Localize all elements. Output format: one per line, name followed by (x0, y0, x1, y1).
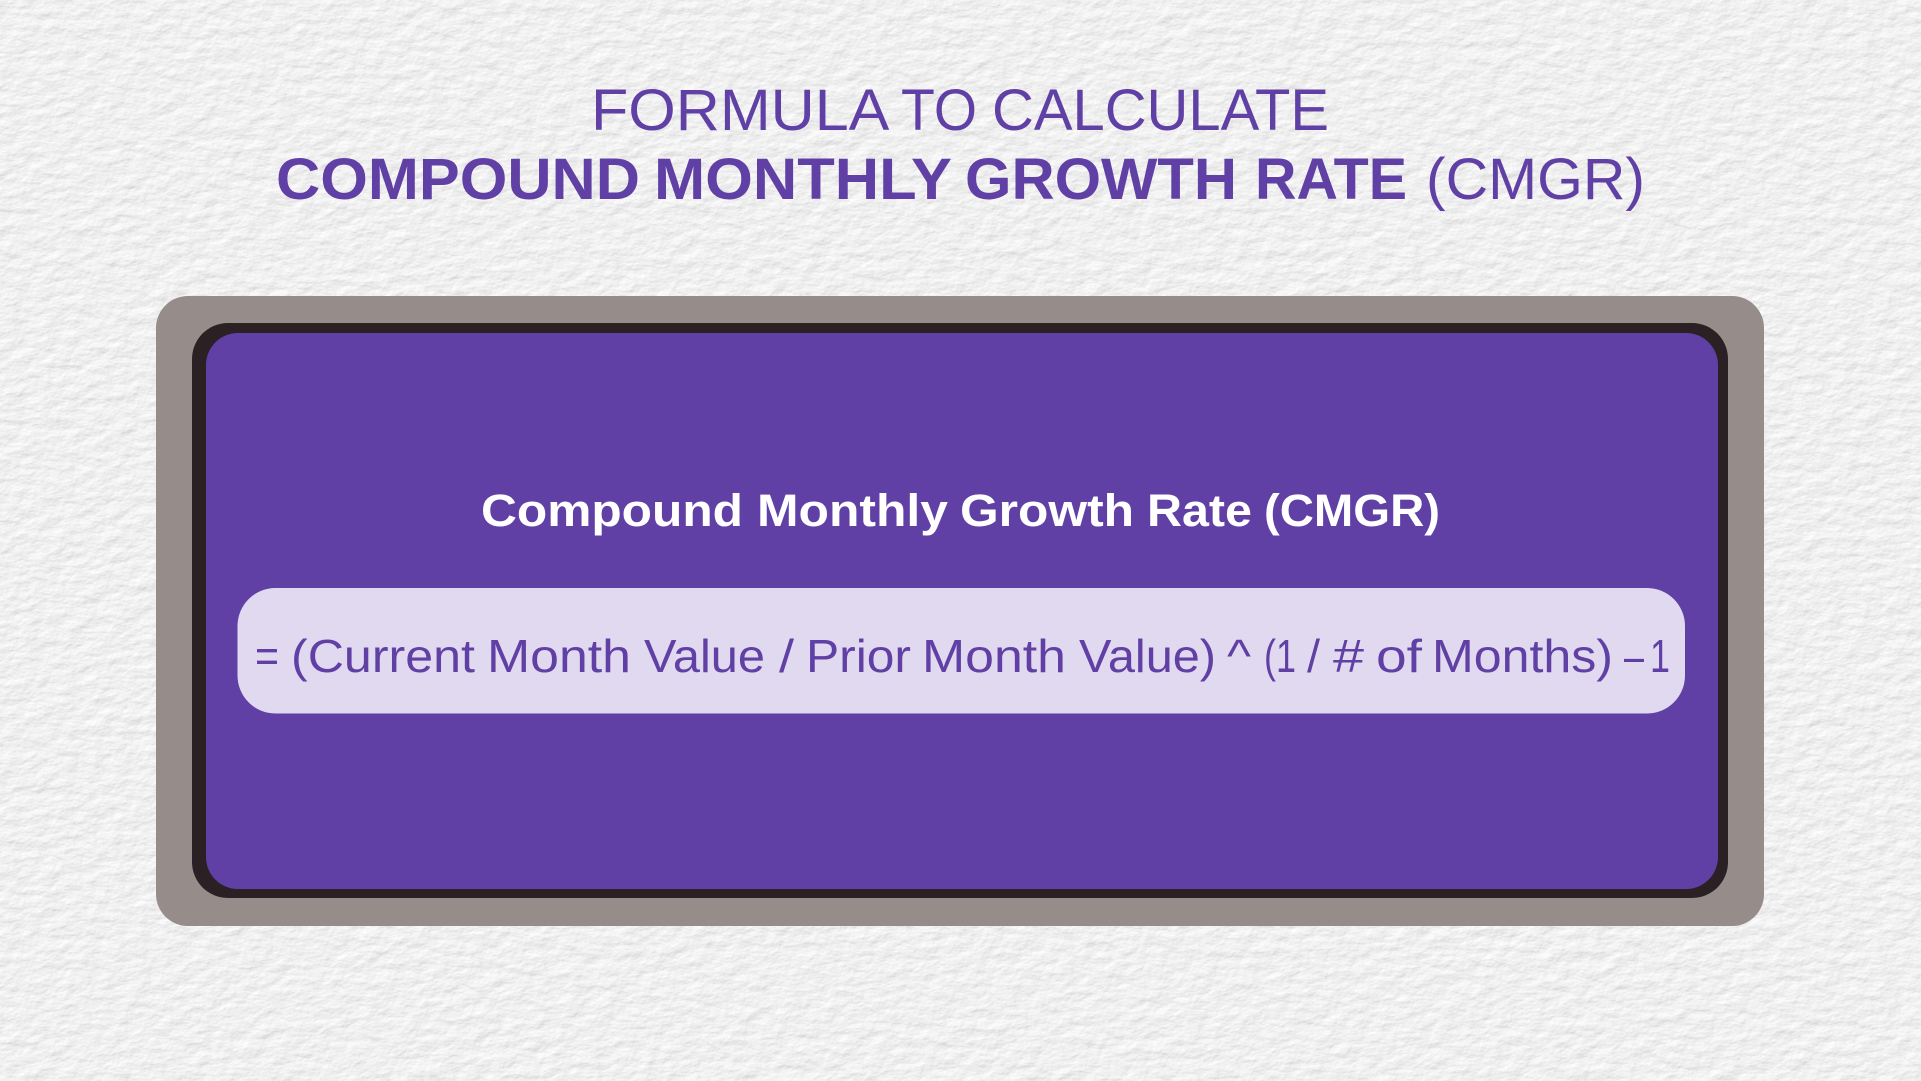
heading: CMGR: Compound (481, 485, 743, 536)
formula text: # (1333, 630, 1364, 682)
formula text: Value) (1079, 630, 1216, 682)
title line 2: MONTHLY (654, 147, 952, 212)
heading: CMGR: Rate (1147, 485, 1252, 536)
title line 2: (CMGR) (1426, 147, 1645, 212)
formula text: of (1376, 630, 1422, 682)
formula text: = (255, 630, 279, 682)
formula text: (Current (291, 630, 475, 682)
formula text: / (1307, 630, 1320, 682)
formula text: Months) (1432, 630, 1613, 682)
formula text: ^ (1227, 630, 1251, 682)
panel: purple fill (206, 333, 1718, 889)
heading: CMGR: (CMGR) (1264, 485, 1440, 536)
formula text: Value (644, 630, 765, 682)
formula text: / (779, 630, 794, 682)
formula text: Month (922, 630, 1066, 682)
formula pill (238, 588, 1685, 714)
panel: outer frame (156, 296, 1764, 926)
heading: CMGR: Growth (960, 485, 1134, 536)
panel: formula card (156, 296, 1764, 926)
title line 2: GROWTH (965, 147, 1237, 212)
title line 2: COMPOUND (276, 147, 640, 212)
title line 1: TO (901, 78, 977, 143)
formula text: – (1624, 630, 1644, 682)
formula text: Month (487, 630, 631, 682)
formula text: (1 (1264, 630, 1296, 682)
title (276, 78, 1645, 212)
title line 1: FORMULA (591, 78, 890, 143)
title line 1: CALCULATE (992, 78, 1329, 143)
heading: CMGR: Monthly (757, 485, 948, 536)
panel: dark border (192, 323, 1728, 898)
title line 2: RATE (1255, 147, 1407, 212)
formula text: Prior (806, 630, 911, 682)
formula text: 1 (1650, 630, 1670, 682)
